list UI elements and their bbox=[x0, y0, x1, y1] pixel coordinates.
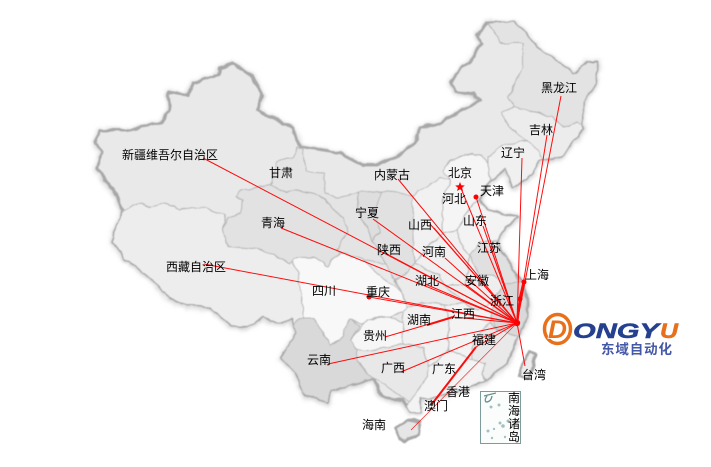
region: Zhejiang bbox=[490, 283, 528, 337]
province labels: 河南 bbox=[422, 243, 446, 260]
province labels bbox=[122, 79, 577, 433]
region: Yunnan bbox=[280, 318, 372, 405]
region: Qinghai bbox=[223, 185, 348, 267]
region: Henan bbox=[415, 230, 470, 285]
province labels: 西藏自治区 bbox=[166, 258, 226, 275]
region: Guangdong bbox=[406, 352, 485, 413]
province labels: 内蒙古 bbox=[374, 166, 410, 183]
province labels: 海南 bbox=[362, 416, 386, 433]
region: Shanxi bbox=[414, 176, 450, 196]
region: Gansu bbox=[270, 148, 385, 263]
region: Shandong bbox=[457, 200, 517, 255]
region: Jilin bbox=[500, 106, 583, 160]
region: Heilongjiang bbox=[488, 21, 598, 124]
province labels: 澳门 bbox=[424, 397, 448, 414]
label: South China Sea islands: 诸 bbox=[508, 415, 520, 432]
province labels: 青海 bbox=[261, 214, 285, 231]
region: Hunan bbox=[401, 312, 404, 322]
inset: South China Sea islands bbox=[480, 389, 520, 445]
province labels: 广东 bbox=[432, 360, 456, 377]
logo Chinese name: 东域自动化 bbox=[601, 338, 672, 358]
label: South China Sea islands: 岛 bbox=[508, 428, 520, 445]
region: Jiangsu bbox=[470, 240, 520, 285]
logo: DONGYU: U bbox=[660, 320, 679, 343]
province labels: 吉林 bbox=[529, 121, 553, 138]
logo ring bbox=[544, 314, 570, 344]
region: Guizhou bbox=[350, 317, 403, 350]
logo: DONGYU: ONGY bbox=[573, 320, 662, 343]
region: Anhui bbox=[445, 255, 505, 310]
province labels: 重庆 bbox=[366, 283, 390, 300]
province labels: 黑龙江 bbox=[541, 79, 577, 96]
region: Jiangxi bbox=[446, 302, 494, 358]
province labels: 辽宁 bbox=[501, 144, 525, 161]
province labels: 广西 bbox=[381, 359, 405, 376]
region: Hebei bbox=[442, 153, 490, 233]
region: Hainan bbox=[396, 420, 420, 441]
map of China bbox=[95, 15, 605, 441]
province labels: 江西 bbox=[451, 305, 475, 322]
province labels: 上海 bbox=[525, 266, 549, 283]
province labels: 山西 bbox=[408, 216, 432, 233]
region: Taiwan bbox=[520, 351, 535, 378]
label: South China Sea islands: 南 bbox=[508, 389, 520, 406]
province labels: 浙江 bbox=[490, 292, 514, 309]
province labels: 河北 bbox=[442, 190, 466, 207]
region: Sichuan bbox=[292, 252, 407, 345]
region: Shaanxi bbox=[372, 190, 415, 292]
province labels: 贵州 bbox=[363, 327, 387, 344]
region: Tibet bbox=[112, 202, 296, 327]
region: Ningxia bbox=[357, 190, 382, 240]
province labels: 甘肃 bbox=[269, 164, 293, 181]
label: South China Sea islands: 海 bbox=[508, 402, 520, 419]
region: Hubei bbox=[395, 263, 465, 307]
region: Fujian bbox=[482, 322, 518, 380]
province labels: 云南 bbox=[307, 351, 331, 368]
markers bbox=[366, 182, 526, 326]
province labels: 新疆维吾尔自治区 bbox=[122, 146, 218, 163]
province labels: 山东 bbox=[463, 212, 487, 229]
province labels: 安徽 bbox=[465, 272, 489, 289]
province labels: 江苏 bbox=[477, 239, 501, 256]
logo: DONGYU bbox=[544, 314, 679, 358]
province labels: 天津 bbox=[480, 182, 504, 199]
province labels: 福建 bbox=[472, 331, 496, 348]
logo wordmark: D bbox=[548, 317, 567, 344]
province labels: 北京 bbox=[448, 164, 472, 181]
province labels: 四川 bbox=[312, 282, 336, 299]
province labels: 湖北 bbox=[415, 272, 439, 289]
province labels: 宁夏 bbox=[355, 204, 379, 221]
province labels: 陕西 bbox=[377, 241, 401, 258]
region: Guangxi bbox=[372, 376, 410, 402]
route lines to hub bbox=[203, 96, 561, 430]
province labels: 台湾 bbox=[522, 366, 546, 383]
province labels: 湖南 bbox=[407, 311, 431, 328]
province labels: 香港 bbox=[446, 383, 470, 400]
region: Liaoning bbox=[487, 140, 542, 188]
